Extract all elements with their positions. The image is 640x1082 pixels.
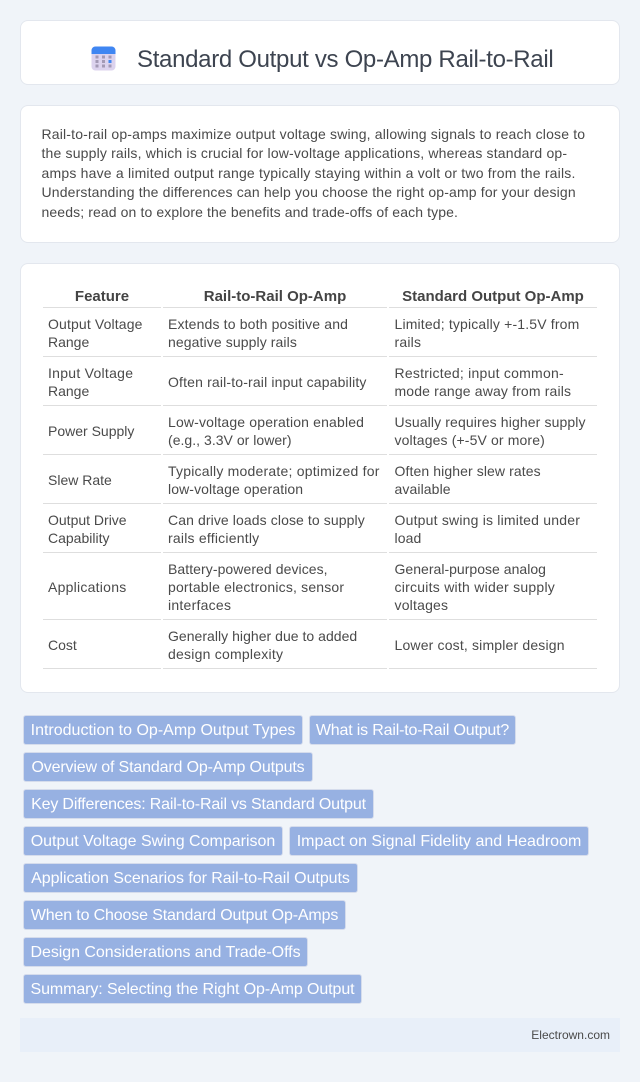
row: cost: design complexity <box>168 646 283 662</box>
panel: intro text <box>20 105 620 243</box>
row: applications <box>43 561 597 620</box>
row: applications: Battery-powered devices, <box>168 561 328 577</box>
tag: what is rail-to-rail: What is Rail-to-Rail Output? <box>316 722 509 739</box>
footer credit: Electrown.com <box>531 1028 610 1042</box>
tag: application scenarios <box>23 863 358 893</box>
row: output drive capability: Output Drive <box>48 512 127 528</box>
row: applications: portable electronics, sensor <box>168 579 344 595</box>
tag: design considerations <box>23 937 308 967</box>
row: output voltage range: Extends to both positive and <box>168 316 348 332</box>
intro paragraph: the supply rails, which is crucial for low-voltage applications, whereas standard op- <box>42 145 567 161</box>
row: input voltage range: mode range away from rails <box>394 383 571 399</box>
tag: application scenarios: Application Scenarios for Rail-to-Rail Outputs <box>31 870 350 887</box>
row: output voltage range <box>43 316 597 357</box>
row: output voltage range: negative supply rails <box>168 334 297 350</box>
tag: introduction: Introduction to Op-Amp Output Types <box>31 722 295 739</box>
table header <box>43 288 597 308</box>
row: output voltage range: rails <box>394 334 421 350</box>
row: cost: Lower cost, simpler design <box>394 637 565 653</box>
panel: comparison table <box>20 263 620 693</box>
tag: introduction <box>23 715 303 745</box>
row: slew rate: Typically moderate; optimized for <box>168 463 380 479</box>
tag: what is rail-to-rail <box>309 715 516 745</box>
row: input voltage range: Input Voltage <box>48 365 133 381</box>
row: output drive capability: Capability <box>48 530 109 546</box>
row: cost: Cost <box>48 637 77 653</box>
tag list: table of contents <box>23 715 589 1004</box>
tag: key differences <box>23 789 374 819</box>
row: power supply: voltages (+-5V or more) <box>394 432 545 448</box>
row: output drive capability: Output swing is limited under <box>394 512 580 528</box>
row: slew rate <box>43 463 597 504</box>
row: applications: interfaces <box>168 597 231 613</box>
row: output drive capability: rails efficiently <box>168 530 259 546</box>
row: cost: Generally higher due to added <box>168 628 357 644</box>
tag: when to choose <box>23 900 346 930</box>
row: output voltage range: Limited; typically +-1.5V from <box>394 316 579 332</box>
row: slew rate: low-voltage operation <box>168 481 303 497</box>
intro paragraph <box>42 126 585 220</box>
table header: Feature <box>75 288 129 305</box>
tag: key differences: Key Differences: Rail-to-Rail vs Standard Output <box>31 796 366 813</box>
row: output drive capability: Can drive loads close to supply <box>168 512 365 528</box>
row: output voltage range: Output Voltage <box>48 316 143 332</box>
row: applications: Applications <box>48 579 126 595</box>
intro paragraph: Understanding the differences can help you choose the right op-amp for your design <box>42 184 576 200</box>
row: power supply <box>43 414 597 455</box>
icon: calendar grid <box>92 46 116 70</box>
row: input voltage range <box>43 365 597 406</box>
tag: overview <box>23 752 313 782</box>
footer bar <box>20 1018 620 1052</box>
tag: signal fidelity: Impact on Signal Fidelity and Headroom <box>297 833 581 850</box>
row: power supply: Usually requires higher supply <box>394 414 586 430</box>
row: output drive capability: load <box>394 530 421 546</box>
tag: when to choose: When to Choose Standard Output Op-Amps <box>31 907 338 924</box>
intro paragraph: Rail-to-rail op-amps maximize output voltage swing, allowing signals to reach close to <box>42 126 585 142</box>
row: slew rate: Slew Rate <box>48 472 112 488</box>
panel: header <box>20 20 620 85</box>
row: input voltage range: Range <box>48 383 89 399</box>
row: power supply: (e.g., 3.3V or lower) <box>168 432 292 448</box>
row: input voltage range: Often rail-to-rail input capability <box>168 374 367 390</box>
tag: summary <box>23 974 362 1004</box>
row: slew rate: available <box>394 481 451 497</box>
row: applications: circuits with wider supply <box>394 579 555 595</box>
row: output drive capability <box>43 512 597 553</box>
row: applications: voltages <box>394 597 448 613</box>
intro paragraph: amps have a limited output range typically staying within a volt or two from the rails. <box>42 164 576 180</box>
intro paragraph: needs; read on to explore the benefits and trade-offs of each type. <box>42 204 458 220</box>
row: cost <box>43 628 597 669</box>
tag: swing comparison <box>23 826 283 856</box>
tag: summary: Summary: Selecting the Right Op-Amp Output <box>31 981 354 998</box>
row: power supply: Power Supply <box>48 423 134 439</box>
tag: design considerations: Design Considerations and Trade-Offs <box>30 944 301 961</box>
tag: overview: Overview of Standard Op-Amp Outputs <box>31 759 305 776</box>
table header: Standard Output Op-Amp <box>402 288 584 305</box>
tag: swing comparison: Output Voltage Swing Comparison <box>31 833 275 850</box>
row: power supply: Low-voltage operation enabled <box>168 414 364 430</box>
tag: signal fidelity <box>289 826 589 856</box>
title: Standard Output vs Op-Amp Rail-to-Rail <box>137 46 553 73</box>
row: input voltage range: Restricted; input common- <box>394 365 564 381</box>
row: applications: General-purpose analog <box>394 561 546 577</box>
table header: Rail-to-Rail Op-Amp <box>204 288 346 305</box>
row: output voltage range: Range <box>48 334 89 350</box>
row: slew rate: Often higher slew rates <box>394 463 541 479</box>
